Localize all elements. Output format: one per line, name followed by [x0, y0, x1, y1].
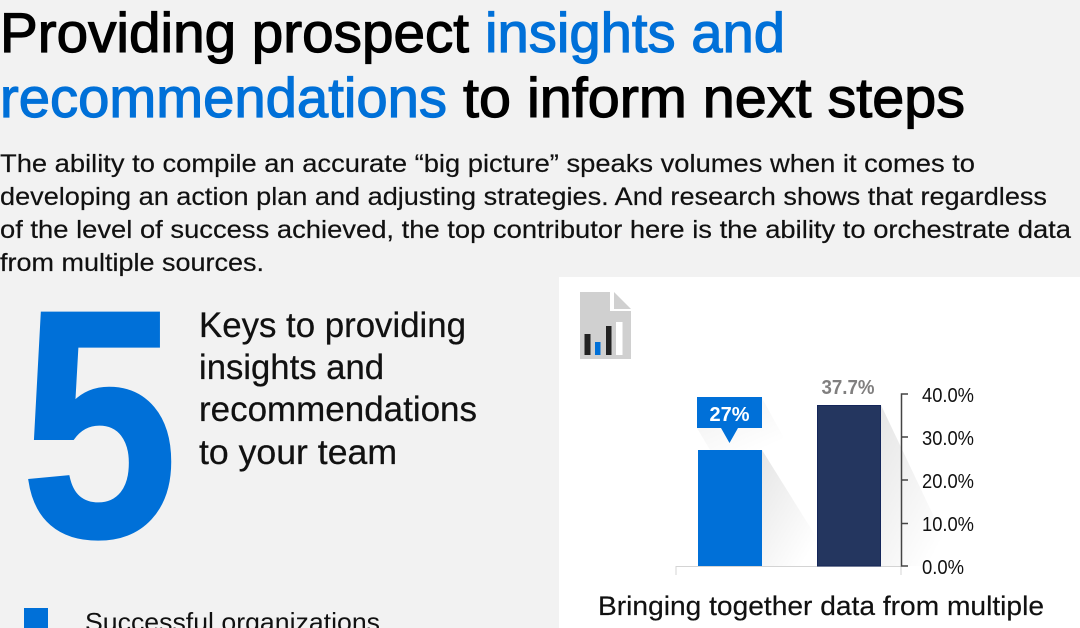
bullet item [24, 607, 380, 628]
chart caption: Bringing together data from multiple [598, 591, 1044, 621]
intro paragraph [0, 150, 1071, 277]
bar chart [676, 377, 974, 579]
value axis [902, 385, 974, 579]
bar shadows [697, 398, 945, 566]
intro paragraph: of the level of success achieved, the top contributor here is the ability to orchestrate data [0, 216, 1071, 244]
value axis: 20.0% [922, 471, 974, 493]
keys heading: recommendations [199, 390, 477, 429]
title: Providing prospect [0, 1, 469, 64]
title [0, 1, 965, 129]
intro paragraph: The ability to compile an accurate “big picture” speaks volumes when it comes to [0, 150, 975, 178]
value axis: 0.0% [922, 557, 964, 579]
title: insights and [485, 1, 785, 64]
icon: document with bar chart [580, 292, 631, 359]
title: recommendations [0, 66, 447, 129]
keys heading: Keys to providing [199, 306, 466, 345]
callout: 27% [697, 397, 762, 443]
value axis: 30.0% [922, 428, 974, 450]
keys heading: insights and [199, 348, 384, 387]
keys heading: to your team [199, 433, 397, 472]
big number 5: 5 [21, 244, 178, 605]
title: to inform next steps [463, 66, 965, 129]
value label: 37.7%: 37.7% [822, 377, 875, 399]
keys heading [199, 306, 477, 472]
intro paragraph: developing an action plan and adjusting strategies. And research shows that regardless [0, 183, 1047, 211]
panel: chart card [559, 277, 1080, 628]
bar: 27% [698, 450, 762, 566]
value axis: 10.0% [922, 514, 974, 536]
bar: 37.7% [818, 406, 880, 566]
callout: 27%: 27% [709, 404, 750, 426]
baseline axis [676, 566, 901, 575]
value axis: 40.0% [922, 385, 974, 407]
intro paragraph: from multiple sources. [0, 249, 264, 277]
bullet square [24, 608, 48, 628]
